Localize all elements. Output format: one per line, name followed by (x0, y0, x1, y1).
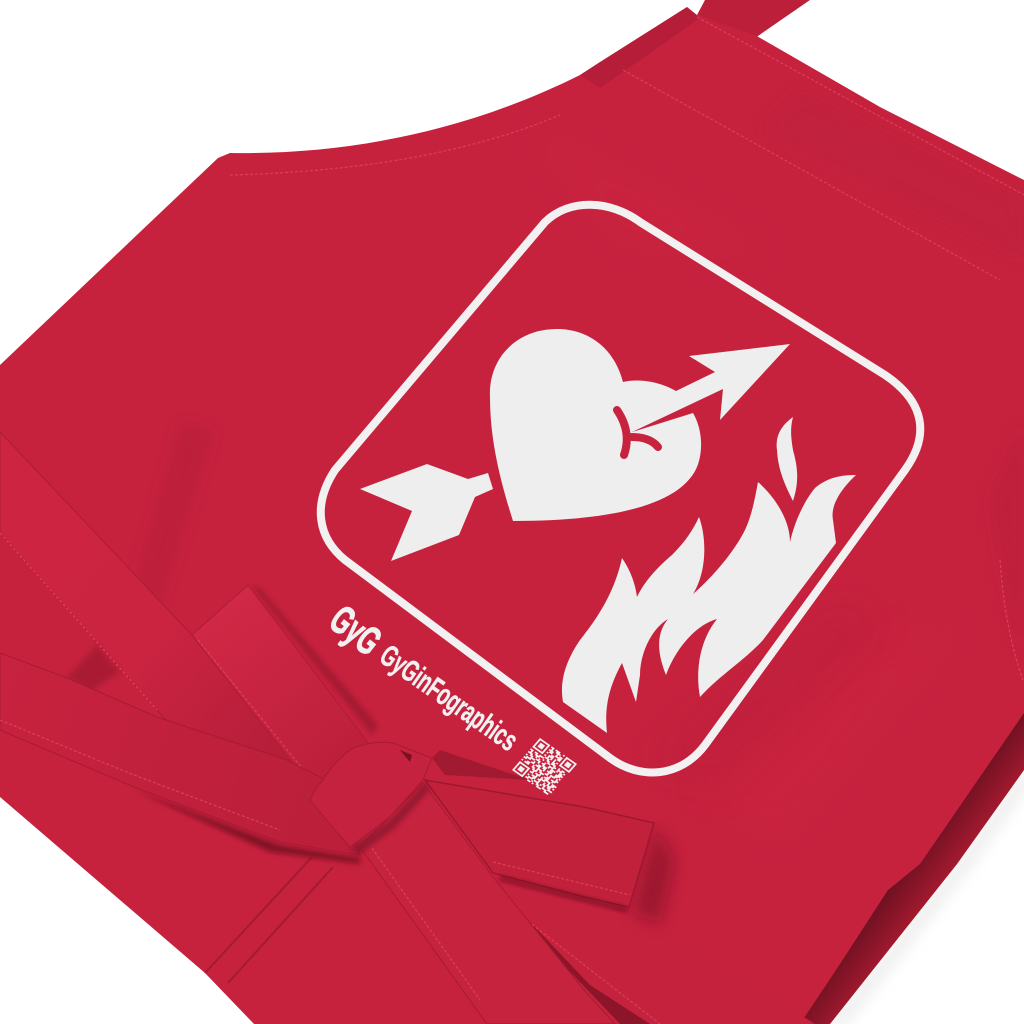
lower band stitching (530, 922, 660, 1024)
right tie tail (425, 780, 654, 907)
icon: heart pierced by arrowhead (490, 329, 790, 521)
hanging band stitching (372, 848, 480, 1000)
knot shadow (432, 750, 530, 780)
QR code (512, 738, 577, 796)
icon: large flames (562, 475, 856, 733)
knot (310, 742, 432, 847)
upper left band stitching (0, 533, 157, 710)
neck fold (580, 7, 700, 88)
left band (0, 653, 360, 855)
pointed band (192, 585, 370, 785)
left band shadow (134, 790, 360, 864)
tail hem stitching (493, 862, 630, 895)
pointed band stitching (198, 640, 301, 766)
logo: GyG mark: GyG (321, 597, 389, 664)
icon: arrow fletching slit (617, 410, 658, 455)
icon: small flame (777, 417, 797, 501)
hanging band (360, 783, 615, 1024)
dark gap beside hanging band (528, 920, 650, 1024)
left band stitching (0, 720, 280, 830)
tail shadow (632, 825, 675, 925)
knot underside shadow (350, 782, 430, 856)
pocket stitching (205, 857, 333, 983)
apron ties (0, 432, 815, 1024)
upper left band shadow (67, 645, 120, 692)
printed badge (321, 205, 920, 773)
neck strap (697, 0, 810, 38)
lower tie band (800, 1018, 815, 1024)
ground shadow (835, 773, 1024, 1024)
brand name: GyGinFographics (374, 639, 524, 758)
upper left band (0, 432, 300, 770)
stitching (230, 17, 1024, 680)
badge outline (321, 205, 920, 773)
pointed band shadow (252, 586, 378, 735)
tail hem (500, 878, 627, 910)
icon: arrow tail (360, 464, 493, 561)
bottom right fold (800, 713, 1024, 1024)
knot fold (400, 750, 412, 762)
